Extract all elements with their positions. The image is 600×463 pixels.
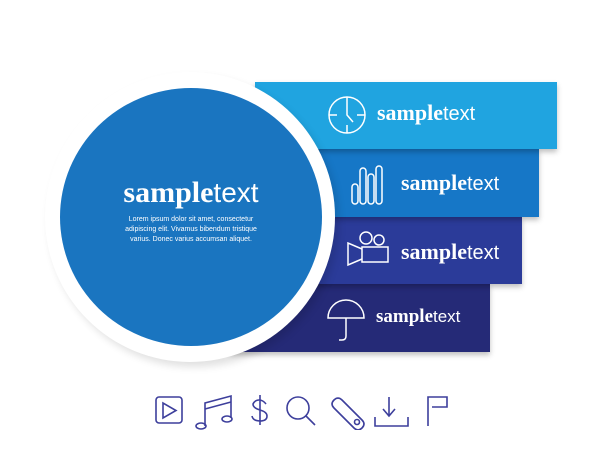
circle ring [45,72,335,362]
icon: camera [347,231,389,266]
bar 3 [240,217,522,284]
icon: clock [328,96,366,134]
icon: tag [332,398,364,430]
icon: flag [428,397,447,426]
icon: umbrella [327,299,365,341]
icon: dollar [252,395,267,425]
icon: magnifier [287,397,315,425]
icon: bar chart [351,165,383,205]
label 2: sampletext [401,170,499,195]
icon: download [375,397,408,426]
icon: music [196,396,232,429]
label 3: sampletext [401,239,499,264]
label 1: sampletext [377,100,475,125]
label 4: sampletext [376,306,460,327]
bar 4 [230,284,490,352]
icon: play [156,397,182,423]
icon row [155,395,448,430]
circle heading: sampletext [123,176,259,209]
main circle [60,88,322,346]
bar 2 [250,149,539,217]
bar 1 [255,82,557,149]
circle paragraph: Lorem ipsum dolor sit amet, consectetur adipiscing elit. Vivamus bibendum tristique varius. Donec varius accumsan aliquet. [125,216,257,243]
